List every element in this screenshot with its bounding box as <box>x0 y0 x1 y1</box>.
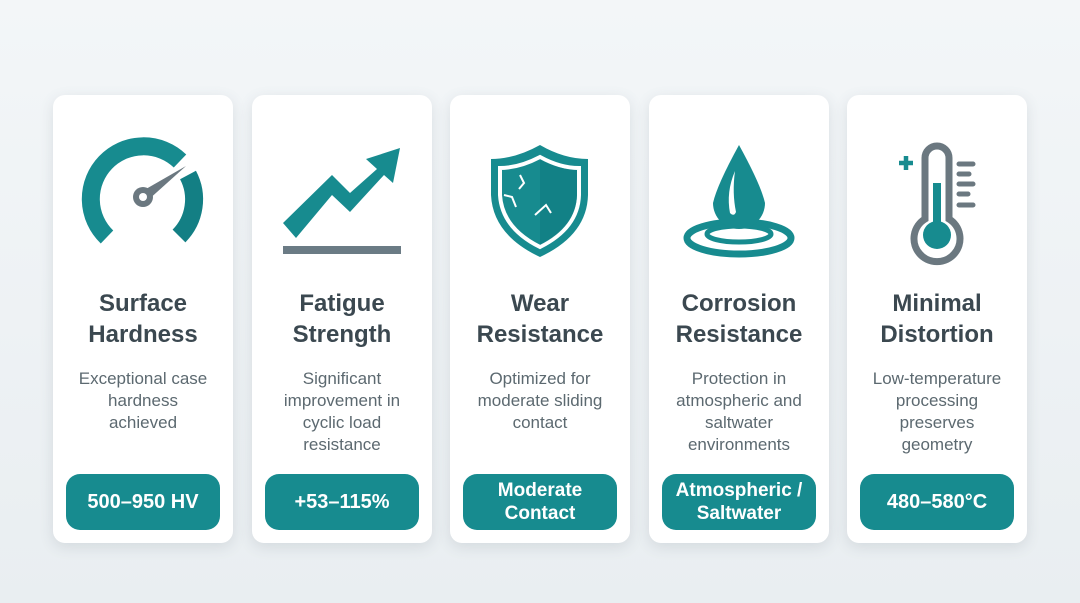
icon: rising arrow <box>283 148 401 254</box>
description: moderate sliding <box>478 391 602 410</box>
description <box>873 369 1001 454</box>
title <box>293 290 391 348</box>
title: Minimal <box>892 290 982 317</box>
icon: thermometer <box>899 142 976 266</box>
description: saltwater <box>705 413 773 432</box>
title <box>676 290 802 348</box>
description: Significant <box>303 369 381 388</box>
badge: Saltwater <box>697 503 781 524</box>
description: resistance <box>303 435 381 454</box>
title: Distortion <box>880 321 994 348</box>
description: Protection in <box>692 369 786 388</box>
card: fatigue strength <box>252 95 432 543</box>
badge <box>463 474 617 530</box>
icon: gauge <box>82 137 204 244</box>
badge <box>860 474 1014 530</box>
title: Corrosion <box>682 290 796 317</box>
badge: Moderate <box>498 480 582 501</box>
description <box>676 369 802 454</box>
description: environments <box>688 435 790 454</box>
card: wear resistance <box>450 95 630 543</box>
badge <box>662 474 816 530</box>
badge <box>66 474 220 530</box>
description: atmospheric and <box>676 391 802 410</box>
description: geometry <box>902 435 972 454</box>
title: Surface <box>99 290 187 317</box>
title <box>477 290 603 348</box>
description: Exceptional case <box>79 369 207 388</box>
title: Wear <box>511 290 569 317</box>
badge: +53–115% <box>294 490 390 512</box>
description: Low-temperature <box>873 369 1001 388</box>
description: cyclic load <box>303 413 381 432</box>
description <box>478 369 602 432</box>
title <box>88 290 198 348</box>
description: processing <box>896 391 978 410</box>
title: Resistance <box>477 321 603 348</box>
icon: cracked shield <box>491 145 588 257</box>
description <box>79 369 207 432</box>
title <box>880 290 994 348</box>
card: minimal distortion <box>847 95 1027 543</box>
description: preserves <box>900 413 974 432</box>
description: achieved <box>109 413 177 432</box>
badge <box>265 474 419 530</box>
title: Hardness <box>88 321 198 348</box>
title: Strength <box>293 321 391 348</box>
description: contact <box>513 413 567 432</box>
card: corrosion resistance <box>649 95 829 543</box>
icon: water drop <box>684 145 794 258</box>
badge: 480–580°C <box>887 490 987 512</box>
title: Resistance <box>676 321 802 348</box>
title: Fatigue <box>299 290 385 317</box>
badge: Contact <box>505 503 575 524</box>
description <box>284 369 400 454</box>
card: surface hardness <box>53 95 233 543</box>
description: Optimized for <box>489 369 591 388</box>
description: improvement in <box>284 391 400 410</box>
description: hardness <box>108 391 178 410</box>
badge: 500–950 HV <box>87 490 199 512</box>
badge: Atmospheric / <box>676 480 802 501</box>
